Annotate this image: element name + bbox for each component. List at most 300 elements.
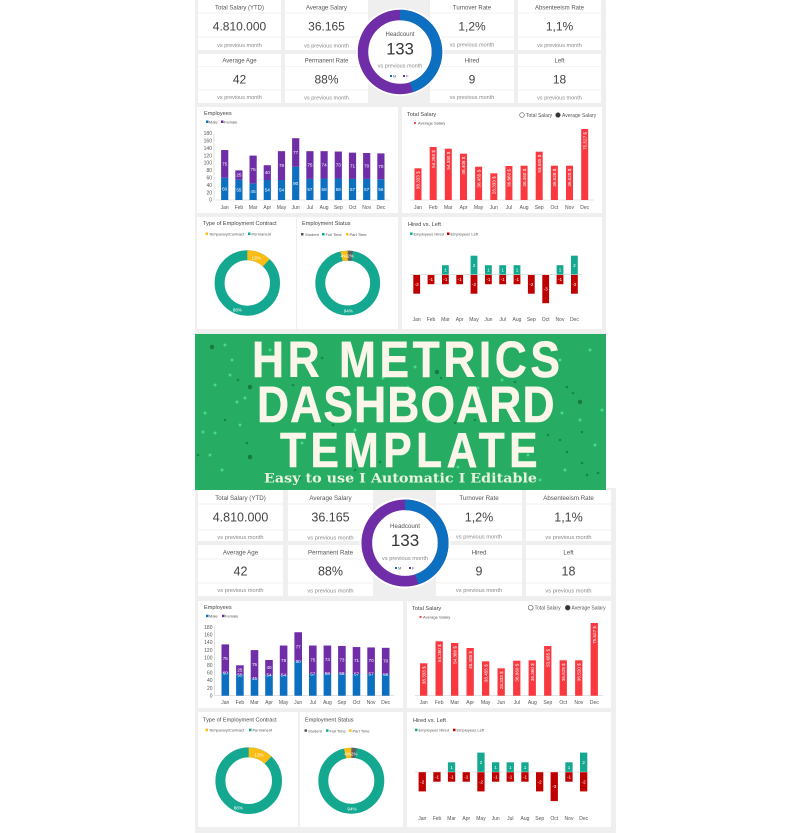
panel: employees chart: 80 [207, 663, 213, 669]
panel: total salary chart: 48.408 $ [461, 156, 466, 175]
panel: total salary chart: Jun [497, 700, 505, 706]
panel: employees chart: 160 [204, 138, 212, 144]
KPI: absenteeism rate: Absenteeism Rate [535, 6, 585, 12]
KPI: hired: vs previous month [450, 95, 494, 101]
panel: hired vs left chart: -1 [486, 277, 491, 282]
panel: employees chart: 80 [206, 168, 212, 174]
KPI: average age: Average Age [223, 550, 259, 556]
panel: employment status: Part Time [350, 232, 367, 237]
KPI: left [526, 545, 611, 596]
panel: total salary chart: 53.685 $ [546, 649, 550, 667]
KPI: total salary [198, 490, 283, 541]
panel: total salary chart: Average Salary [562, 113, 597, 119]
panel: total salary chart: 36.360 $ [530, 663, 535, 681]
panel: hired vs left chart: -1 [515, 277, 519, 282]
panel: hired vs left chart: Feb [433, 816, 442, 822]
KPI: absenteeism rate: Absenteeism Rate [543, 495, 594, 502]
panel: employees chart: 25 [236, 172, 242, 178]
panel: hired vs left chart: Mar [441, 317, 450, 323]
KPI: average age: vs previous month [217, 588, 264, 594]
panel: total salary chart: Mar [444, 205, 453, 211]
headcount donut: F [406, 73, 409, 78]
panel: employees chart: 70 [364, 164, 370, 168]
panel: hired vs left chart: 2 [473, 263, 476, 268]
panel: employees chart: Jan [221, 205, 229, 211]
panel: employees chart: May [277, 205, 287, 211]
KPI: turnover rate: vs previous month [456, 534, 502, 540]
panel: hired vs left chart: -2 [538, 779, 542, 784]
KPI: average salary: Average Salary [306, 6, 347, 12]
panel: employees chart: 54 [266, 673, 272, 678]
subtitle: Easy to use I Automatic I Editable [264, 472, 537, 486]
panel: type of employment contract: 88% [233, 308, 242, 312]
panel: employees chart: 70 [383, 659, 389, 664]
panel: total salary chart: Total Salary [407, 112, 436, 118]
panel: hired vs left chart: Sep [535, 816, 544, 822]
KPI: permanent rate: vs previous month [307, 588, 354, 594]
panel: hired vs left chart: 1 [568, 765, 571, 770]
panel: employees chart: 57 [350, 187, 355, 192]
KPI: total salary: 4.810.000 [213, 510, 268, 524]
KPI: average age [198, 545, 283, 596]
panel: total salary chart: Total Salary [534, 606, 561, 612]
KPI: turnover rate: 1,2% [465, 510, 493, 524]
panel: hired vs left chart: Nov [556, 317, 565, 323]
headcount donut: M [393, 73, 396, 78]
headcount donut: Headcount [385, 32, 415, 38]
panel: employees chart: Female [225, 614, 239, 619]
panel: total salary chart: Dec [590, 700, 599, 706]
KPI: total salary: Total Salary (YTD) [215, 495, 266, 502]
panel: total salary chart: 75.527 $ [582, 132, 587, 150]
panel: total salary chart: 36.520 $ [567, 168, 572, 187]
panel: employees chart: 55 [237, 672, 243, 677]
panel: hired vs left chart: 2 [573, 263, 576, 268]
title text: DASHBOARD [257, 377, 555, 434]
panel: employees chart: 73 [339, 657, 345, 662]
panel: hired vs left chart: Employees Hired [414, 232, 444, 236]
KPI: absenteeism rate: 1,1% [554, 510, 583, 524]
panel: total salary chart: 38.455 $ [476, 169, 481, 188]
KPI: average salary: 36.165 [308, 20, 345, 34]
panel: employees chart: Dec [381, 700, 391, 706]
KPI: turnover rate [436, 490, 522, 541]
panel: hired vs left chart: -3 [544, 286, 548, 292]
KPI: hired: Hired [472, 550, 487, 556]
panel: employees chart: Mar [249, 205, 258, 211]
panel: employment status [297, 217, 398, 329]
KPI: left: vs previous month [537, 96, 582, 102]
panel: employees chart: 74 [325, 657, 330, 662]
panel: employment status [300, 712, 403, 827]
KPI: average age [198, 54, 281, 103]
KPI: average age: 42 [234, 564, 247, 578]
KPI: absenteeism rate: vs previous month [545, 535, 592, 541]
KPI: hired: 9 [476, 564, 483, 578]
title text [252, 332, 560, 478]
panel: employees chart: 60 [223, 670, 228, 675]
panel: employees chart: 57 [310, 672, 316, 676]
headcount donut: vs previous month [382, 556, 428, 562]
panel: total salary chart: Aug [528, 700, 537, 706]
panel: type of employment contract: Type of Employment Contract [203, 718, 277, 724]
panel: hired vs left chart: Apr [462, 816, 471, 822]
KPI: total salary: Total Salary (YTD) [215, 6, 264, 12]
panel: employment status: Full Time [326, 232, 342, 237]
panel: employees chart: 75 [222, 161, 228, 166]
panel: hired vs left chart: -3 [552, 784, 557, 789]
panel: total salary chart: Jan [414, 205, 422, 211]
panel: hired vs left chart: -1 [443, 277, 448, 282]
panel: employees chart: May [279, 700, 289, 706]
KPI: permanent rate [288, 545, 373, 596]
KPI: total salary [198, 0, 281, 50]
panel: total salary chart: Feb [429, 205, 438, 211]
panel: hired vs left chart: Dec [579, 816, 589, 822]
panel: total salary chart: Apr [460, 205, 468, 211]
panel: hired vs left chart: -1 [494, 774, 498, 780]
panel: employees chart: Jan [221, 700, 230, 706]
panel: hired vs left chart: 2 [582, 760, 585, 765]
KPI: left: Left [554, 58, 565, 64]
title banner [195, 332, 606, 490]
panel: total salary chart: 75.527 $ [592, 626, 597, 644]
panel: employees chart: 78 [279, 163, 284, 168]
panel: employees chart: Nov [362, 205, 372, 211]
panel: employees chart: 75 [223, 656, 228, 661]
KPI: left: 18 [562, 564, 575, 578]
panel: hired vs left chart: 1 [494, 765, 497, 770]
panel: hired vs left chart: 2 [480, 760, 483, 765]
panel: employment status: 2% [347, 254, 354, 258]
panel: hired vs left chart: May [469, 317, 479, 323]
panel: employees chart: 180 [204, 625, 213, 631]
panel: employees chart: 75 [310, 657, 316, 662]
title text: HR METRICS [252, 332, 560, 389]
panel: employees chart: 20 [207, 686, 213, 692]
panel: employees chart: Nov [367, 700, 376, 706]
headcount donut [360, 498, 450, 588]
panel: hired vs left chart: -1 [464, 774, 469, 780]
panel: employment status: 94% [347, 807, 357, 812]
panel: hired vs left chart: 1 [501, 268, 504, 273]
panel: hired vs left chart: -1 [458, 277, 462, 282]
panel: hired vs left chart: Jan [418, 816, 427, 822]
panel: employees chart: 57 [354, 672, 359, 676]
panel: employees chart: 40 [207, 678, 213, 684]
KPI: hired: Hired [465, 58, 479, 64]
headcount donut: vs previous month [378, 64, 422, 70]
KPI: total salary: vs previous month [217, 535, 264, 541]
panel: hired vs left chart: Aug [521, 816, 530, 822]
panel: employees chart: 75 [251, 167, 256, 172]
panel: type of employment contract: Permanent [252, 232, 272, 236]
panel: hired vs left chart: Mar [447, 816, 456, 822]
panel: employees chart: Apr [265, 700, 273, 706]
panel: hired vs left chart: 1 [516, 268, 519, 273]
panel: total salary chart: 36.528 $ [552, 168, 557, 187]
panel: employees chart: 140 [204, 146, 212, 152]
panel: total salary chart: Total Salary [412, 606, 441, 612]
panel: hired vs left chart: Jul [507, 816, 514, 822]
top dashboard [195, 0, 606, 334]
panel: employees chart: Jun [294, 700, 302, 706]
panel: hired vs left chart: -1 [523, 774, 527, 780]
panel: employees chart: 0 [209, 198, 212, 204]
panel: total salary chart: Oct [551, 205, 559, 211]
panel: employees chart: Sep [337, 700, 347, 706]
panel: employment status: Part Time [352, 728, 370, 733]
panel: employees chart: Jul [307, 205, 313, 211]
KPI: permanent rate: vs previous month [304, 96, 349, 102]
panel: type of employment contract: Type of Employment Contract [203, 221, 277, 227]
panel: total salary chart: May [474, 205, 484, 211]
KPI: average salary [288, 490, 373, 542]
panel: total salary chart: Average Salary [572, 606, 606, 612]
panel: employment status: Student [308, 728, 323, 733]
panel: hired vs left chart: 1 [559, 268, 562, 273]
headcount donut: 133 [386, 40, 414, 58]
KPI: permanent rate: 88% [318, 564, 343, 578]
panel: employees chart: 57 [369, 672, 374, 676]
panel: hired vs left chart: -1 [435, 774, 439, 780]
panel: employees chart [197, 107, 398, 213]
panel: employees chart: 75 [307, 162, 313, 168]
panel: total salary chart: 38.333 $ [421, 666, 426, 684]
panel: hired vs left chart: Employees Hired [418, 728, 449, 733]
panel: total salary chart: 54.260 $ [437, 644, 442, 662]
panel: employees chart: 75 [252, 662, 257, 667]
panel: total salary chart: 28.333 $ [492, 176, 496, 194]
KPI: permanent rate: Permanent Rate [308, 550, 354, 556]
panel: employment status: 4% [344, 751, 351, 756]
KPI: left [518, 54, 601, 103]
KPI: hired [430, 54, 514, 103]
panel: employees chart: 54 [265, 188, 270, 192]
panel: hired vs left chart: Hired vs. Left [413, 718, 446, 724]
panel: employees chart: Employees [204, 605, 232, 611]
panel: employment status: Employment Status [302, 221, 351, 227]
bottom dashboard [195, 488, 616, 833]
title text: TEMPLATE [280, 422, 538, 478]
panel: employees chart: 20 [206, 190, 212, 196]
panel: hired vs left chart: -2 [415, 282, 419, 287]
panel: total salary chart: 36.860 $ [507, 169, 512, 187]
panel: employees chart: Jul [310, 700, 316, 706]
KPI: left: Left [563, 550, 574, 556]
panel: hired vs left chart: 1 [509, 765, 512, 770]
panel: employment status: Full Time [330, 728, 346, 733]
panel: hired vs left chart: -2 [420, 779, 425, 784]
panel: employees chart: Aug [320, 205, 329, 211]
panel: type of employment contract: Temporary/Contract [209, 728, 245, 733]
panel: type of employment contract: 88% [234, 805, 243, 810]
panel: hired vs left chart: Jun [484, 317, 493, 323]
panel: employees chart: Oct [349, 205, 357, 211]
panel: employees chart: Aug [323, 700, 332, 706]
panel: employment status: Employment Status [305, 718, 354, 724]
panel: hired vs left chart: -2 [472, 282, 476, 287]
panel: employees chart: 77 [296, 644, 301, 649]
panel: employees chart: 58 [322, 187, 327, 192]
panel: employees chart: 120 [204, 648, 213, 654]
panel: employees chart: 180 [204, 131, 212, 137]
panel: total salary chart: 28.333 $ [499, 671, 504, 689]
KPI: turnover rate: 1,2% [458, 20, 486, 34]
panel: hired vs left chart: 1 [487, 268, 490, 273]
panel: type of employment contract [197, 217, 296, 329]
panel: employees chart: 54 [279, 188, 284, 192]
panel: employees chart: 45 [251, 189, 256, 194]
panel: total salary chart: Oct [559, 700, 568, 706]
panel: total salary chart: Aug [520, 205, 529, 211]
panel: total salary chart: Sep [543, 700, 552, 706]
headcount donut: M [398, 565, 401, 570]
panel: type of employment contract [198, 712, 298, 827]
panel: employees chart: 57 [307, 187, 313, 192]
panel: hired vs left chart: -1 [450, 774, 454, 780]
panel: employees chart: Feb [235, 205, 243, 211]
panel: employees chart: 90 [293, 181, 299, 186]
panel: employees chart: 90 [296, 659, 301, 664]
panel: employees chart: 60 [207, 671, 213, 677]
KPI: average salary [285, 0, 368, 50]
panel: type of employment contract: Permanent [252, 728, 273, 733]
panel: type of employment contract: 12% [251, 256, 261, 260]
panel: total salary chart: Dec [580, 205, 590, 211]
panel: employees chart: 77 [293, 150, 299, 155]
panel: total salary chart: Average Salary [418, 120, 445, 126]
panel: total salary chart: 54.380 $ [446, 151, 451, 170]
panel: total salary chart: Feb [435, 700, 444, 706]
panel: hired vs left chart: -1 [429, 277, 433, 282]
panel: hired vs left chart: -1 [508, 774, 513, 780]
panel: employees chart: 40 [206, 183, 212, 189]
panel: total salary chart: May [481, 700, 491, 706]
panel: hired vs left chart: Feb [427, 317, 436, 323]
panel: employees chart: 160 [204, 633, 213, 639]
panel: hired vs left chart: 1 [450, 765, 453, 770]
panel: employees chart: 40 [266, 665, 272, 670]
panel: hired vs left chart: -2 [582, 779, 586, 784]
KPI: average salary: vs previous month [307, 536, 354, 542]
KPI: average salary: Average Salary [309, 495, 352, 502]
panel: employees chart: 70 [378, 164, 384, 169]
panel: total salary chart: 53.685 $ [537, 154, 542, 173]
KPI: turnover rate: vs previous month [450, 42, 494, 48]
headcount donut: F [412, 565, 415, 570]
headcount donut: 133 [391, 531, 419, 550]
panel: employees chart: Employees [204, 111, 232, 117]
panel: employees chart: 56 [378, 187, 384, 192]
panel: hired vs left chart: Employees Left [450, 232, 479, 236]
panel: employees chart: 100 [204, 655, 213, 661]
panel: hired vs left chart: May [476, 816, 486, 822]
panel: employees chart: Apr [263, 205, 272, 211]
KPI: average age: vs previous month [217, 95, 262, 101]
panel: hired vs left chart: Dec [570, 317, 579, 323]
panel: employees chart: Sep [334, 205, 343, 211]
panel: employees chart: 25 [237, 668, 243, 672]
panel: hired vs left chart: Aug [513, 317, 522, 323]
panel: employees chart: Male [209, 120, 218, 124]
KPI: average salary: vs previous month [304, 44, 349, 50]
panel: hired vs left chart: -1 [567, 774, 571, 780]
KPI: total salary: vs previous month [217, 43, 262, 49]
KPI: permanent rate: 88% [314, 72, 339, 86]
panel: employees chart: 60 [222, 186, 228, 191]
KPI: permanent rate [285, 54, 368, 103]
KPI: average age: Average Age [222, 58, 257, 64]
panel: employees chart: 58 [325, 671, 330, 676]
KPI: total salary: 4.810.000 [213, 20, 267, 34]
panel: employees chart: 71 [350, 163, 355, 168]
KPI: hired: vs previous month [456, 588, 502, 594]
panel: total salary chart: 38.455 $ [483, 664, 488, 682]
KPI: absenteeism rate: vs previous month [537, 43, 582, 49]
panel: hired vs left chart: Sep [527, 317, 536, 323]
panel: hired vs left chart: 1 [444, 268, 447, 273]
panel: employees chart: 57 [364, 187, 370, 192]
panel: total salary chart: 36.360 $ [522, 168, 527, 187]
panel: employees chart: 56 [383, 672, 389, 677]
panel: employees chart: Female [224, 120, 238, 124]
KPI: absenteeism rate [526, 490, 611, 541]
panel: total salary chart: Total Salary [526, 113, 553, 119]
panel: hired vs left chart [407, 712, 611, 827]
panel: total salary chart: Jul [514, 700, 520, 706]
panel: hired vs left chart [402, 217, 602, 329]
panel: total salary chart: Nov [574, 700, 584, 706]
panel: employees chart: 40 [265, 170, 270, 175]
panel: total salary chart: 54.260 $ [431, 150, 436, 168]
panel: total salary chart: Jan [420, 700, 428, 706]
panel: employees chart: 70 [369, 658, 374, 663]
panel: employees chart: Feb [236, 700, 244, 706]
panel: type of employment contract: 12% [254, 752, 264, 757]
panel: employment status: 94% [344, 308, 353, 314]
KPI: left: vs previous month [545, 588, 592, 594]
panel: hired vs left chart: Employees Left [456, 728, 485, 733]
panel: total salary chart: Apr [466, 700, 474, 706]
panel: hired vs left chart: Jan [413, 317, 421, 323]
panel: hired vs left chart: Oct [550, 816, 559, 822]
panel: employees chart: 100 [204, 161, 212, 167]
panel: hired vs left chart: Hired vs. Left [408, 222, 441, 228]
panel: employment status: Student [305, 232, 320, 237]
panel: total salary chart: Sep [535, 205, 544, 211]
panel: hired vs left chart: -1 [558, 277, 562, 282]
panel: employees chart: 45 [252, 676, 257, 681]
KPI: hired: 9 [469, 72, 476, 86]
panel: hired vs left chart: Apr [456, 317, 464, 323]
panel: total salary chart [407, 601, 611, 708]
panel: employees chart: Dec [376, 205, 386, 211]
panel: employees chart: 71 [354, 658, 359, 663]
panel: total salary chart: Jun [490, 205, 498, 211]
headcount donut: Headcount [390, 523, 420, 530]
panel: total salary chart: Jul [506, 205, 512, 211]
panel: employees chart: Male [209, 614, 218, 619]
panel: total salary chart: 38.333 $ [416, 171, 421, 189]
panel: hired vs left chart: -2 [479, 779, 483, 784]
KPI: turnover rate: Turnover Rate [459, 495, 499, 502]
panel: hired vs left chart: -2 [529, 282, 534, 287]
panel: employees chart: 60 [206, 176, 212, 182]
panel: total salary chart: Average Salary [423, 615, 450, 620]
panel: total salary chart: 54.380 $ [452, 646, 457, 664]
panel: hired vs left chart: 1 [524, 765, 527, 770]
